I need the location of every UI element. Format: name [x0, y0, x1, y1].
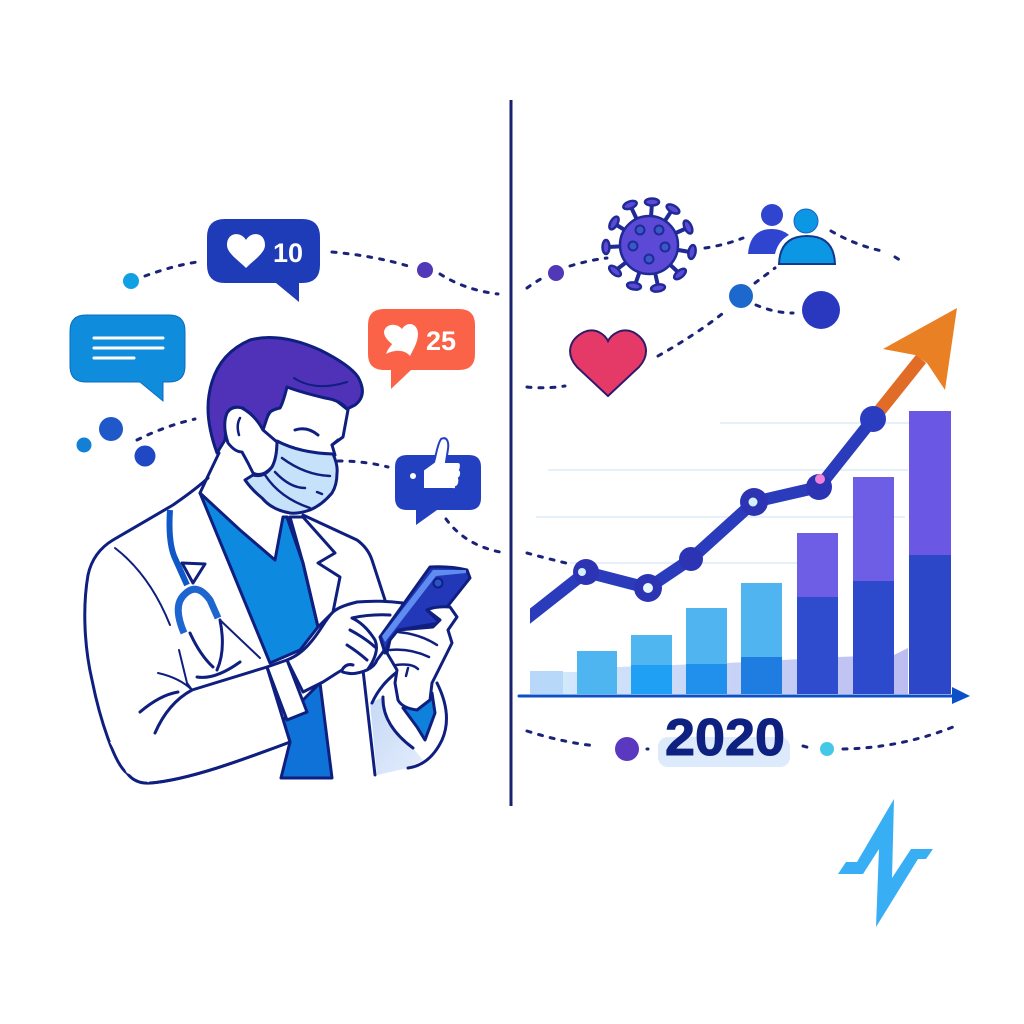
central divider line [510, 100, 512, 806]
left coat creases [115, 548, 260, 712]
sleeve and arm [110, 667, 290, 783]
lightning logo [838, 799, 933, 927]
dotted connectors right [527, 231, 903, 564]
icon: heart [570, 330, 646, 396]
neck lines [200, 453, 219, 493]
coat fill [85, 478, 448, 783]
doctor illustration [85, 338, 470, 783]
orange arrow [873, 308, 957, 419]
reaction bubble with 25 [368, 309, 475, 389]
dotted connectors left [76, 252, 500, 552]
coat outline [85, 478, 290, 783]
area [563, 648, 908, 694]
writing hand [287, 601, 403, 692]
ear [225, 407, 277, 475]
reaction bubble with 25: 25 [426, 326, 456, 356]
bars [530, 411, 951, 694]
coat shaded hem [370, 697, 423, 775]
like bubble with heart and 10: 10 [273, 238, 303, 268]
holding hand [387, 607, 457, 710]
cuff [267, 660, 307, 720]
stethoscope [170, 510, 240, 677]
icon: virus [602, 198, 697, 293]
message bubble with text lines [70, 315, 185, 401]
line nodes [573, 406, 886, 602]
trend line [520, 419, 873, 624]
scrubs lower [281, 683, 332, 778]
mask [245, 441, 337, 513]
hair [208, 338, 362, 453]
axis [519, 694, 955, 698]
chart [519, 308, 970, 704]
face [260, 385, 348, 470]
bottom dotted timeline [527, 727, 953, 761]
like bubble with heart and 10 [207, 219, 320, 302]
year label: 2020 [665, 709, 785, 767]
phone [380, 567, 470, 653]
right coat lapel [290, 517, 340, 627]
blue cuff [403, 693, 435, 740]
closed eye [295, 429, 318, 435]
grid lines [536, 423, 910, 563]
icon: people [748, 204, 835, 264]
scrubs top [200, 493, 318, 663]
thumbs up bubble [395, 438, 481, 525]
